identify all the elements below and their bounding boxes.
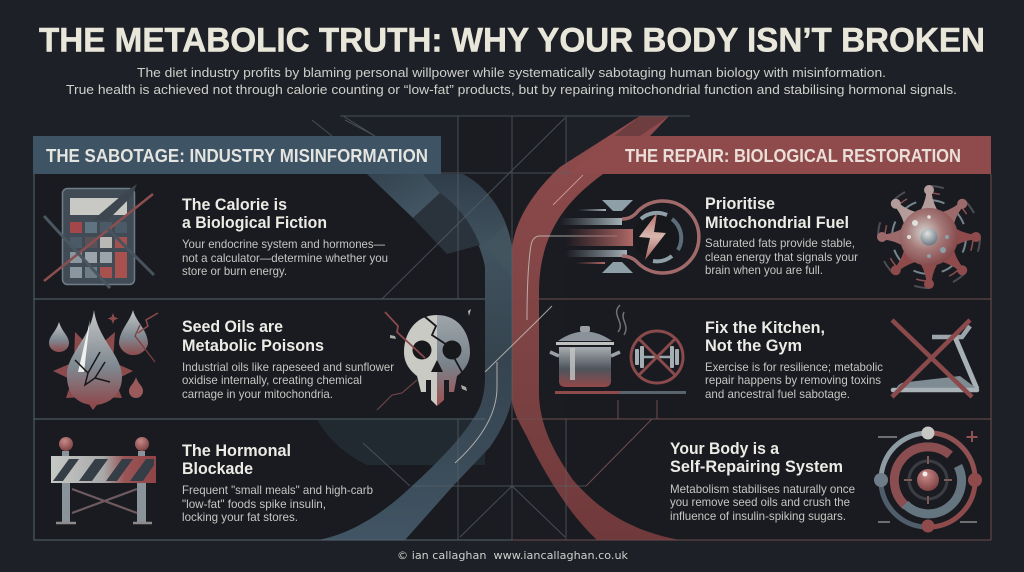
icon: road barrier <box>51 437 156 523</box>
text: fix the kitchen <box>705 318 883 401</box>
heading: the repair: THE REPAIR: BIOLOGICAL RESTORATION <box>625 146 961 166</box>
text: calorie: a Biological Fiction <box>182 213 327 232</box>
icon: mitochondrion cell <box>877 185 981 289</box>
icon: crossed treadmill <box>892 320 977 397</box>
subtitle: True health is achieved not through calorie counting or “low-fat” products, but by repairing mitochondrial function and stabilising hormonal signals. <box>66 82 957 97</box>
subtitle <box>66 65 957 97</box>
text: fix the kitchen: Fix the Kitchen, <box>705 318 825 337</box>
heading: the sabotage <box>33 136 441 174</box>
text: self-repairing system: you remove seed oils and crush the <box>670 495 850 509</box>
text: self-repairing system <box>670 439 855 523</box>
text: calorie: Your endocrine system and hormones— <box>182 237 385 251</box>
text: fix the kitchen: repair happens by removing toxins <box>705 373 881 387</box>
text: calorie <box>182 195 388 278</box>
text: mitochondrial fuel: clean energy that signals your <box>705 250 858 264</box>
text: seed oils: Seed Oils are <box>182 317 283 336</box>
text: seed oils: carnage in your mitochondria. <box>182 387 333 401</box>
text: calorie: The Calorie is <box>182 195 287 214</box>
blue swoosh: sabotage <box>317 174 512 540</box>
text: hormonal blockade: locking your fat stores. <box>182 510 298 524</box>
text: fix the kitchen: Not the Gym <box>705 336 802 355</box>
text: hormonal blockade: Blockade <box>182 459 253 478</box>
text: seed oils: Metabolic Poisons <box>182 336 324 355</box>
panel frame lines: left <box>34 174 512 540</box>
text: self-repairing system: Self-Repairing System <box>670 457 843 476</box>
text: calorie: not a calculator—determine whether you <box>182 251 388 265</box>
text: fix the kitchen: Exercise is for resilience; metabolic <box>705 360 883 374</box>
text: fix the kitchen: and ancestral fuel sabotage. <box>705 387 850 401</box>
icon: self-repair cycle <box>874 426 982 532</box>
text: seed oils <box>182 317 394 401</box>
icon: crossed calculator <box>44 184 154 288</box>
icon: mitochondrial energy bolt <box>560 200 699 273</box>
text: mitochondrial fuel <box>705 194 858 277</box>
text: self-repairing system: Your Body is a <box>670 439 780 458</box>
panel backgrounds <box>34 116 991 540</box>
text: calorie: store or burn energy. <box>182 264 287 278</box>
heading: the sabotage: THE SABOTAGE: INDUSTRY MISINFORMATION <box>46 146 428 166</box>
text: hormonal blockade: The Hormonal <box>182 441 291 460</box>
icon: broken skull <box>377 309 471 410</box>
text: hormonal blockade: Frequent "small meals" and high-carb <box>182 483 373 497</box>
text: mitochondrial fuel: Mitochondrial Fuel <box>705 213 849 232</box>
text: seed oils: oxidise internally, creating chemical <box>182 373 362 387</box>
grid lines <box>312 116 690 540</box>
icon: cracked oil drops <box>49 310 158 410</box>
icon: pot and crossed dumbbell <box>550 305 686 394</box>
text: mitochondrial fuel: Saturated fats provide stable, <box>705 236 855 250</box>
text: mitochondrial fuel: Prioritise <box>705 194 775 213</box>
text: self-repairing system: influence of insulin-spiking sugars. <box>670 509 846 523</box>
panel: the repair <box>550 136 991 532</box>
heading: the repair <box>570 136 991 174</box>
subtitle: The diet industry profits by blaming personal willpower while systematically sabotaging human biology with misinformation. <box>137 65 886 80</box>
text: hormonal blockade: "low-fat" foods spike insulin, <box>182 497 326 511</box>
highlight lines on swooshes <box>455 175 617 463</box>
text: self-repairing system: Metabolism stabilises naturally once <box>670 482 855 496</box>
text: mitochondrial fuel: brain when you are full. <box>705 263 823 277</box>
text: seed oils: Industrial oils like rapeseed and sunflower <box>182 360 394 374</box>
text: hormonal blockade <box>182 441 373 524</box>
panel: the sabotage <box>33 136 471 524</box>
footer credit: © ian callaghan www.iancallaghan.co.uk <box>397 549 629 562</box>
title: THE METABOLIC TRUTH: WHY YOUR BODY ISN’T BROKEN <box>39 22 985 60</box>
panel frame lines: right <box>512 174 991 540</box>
red swoosh: repair <box>512 116 680 540</box>
